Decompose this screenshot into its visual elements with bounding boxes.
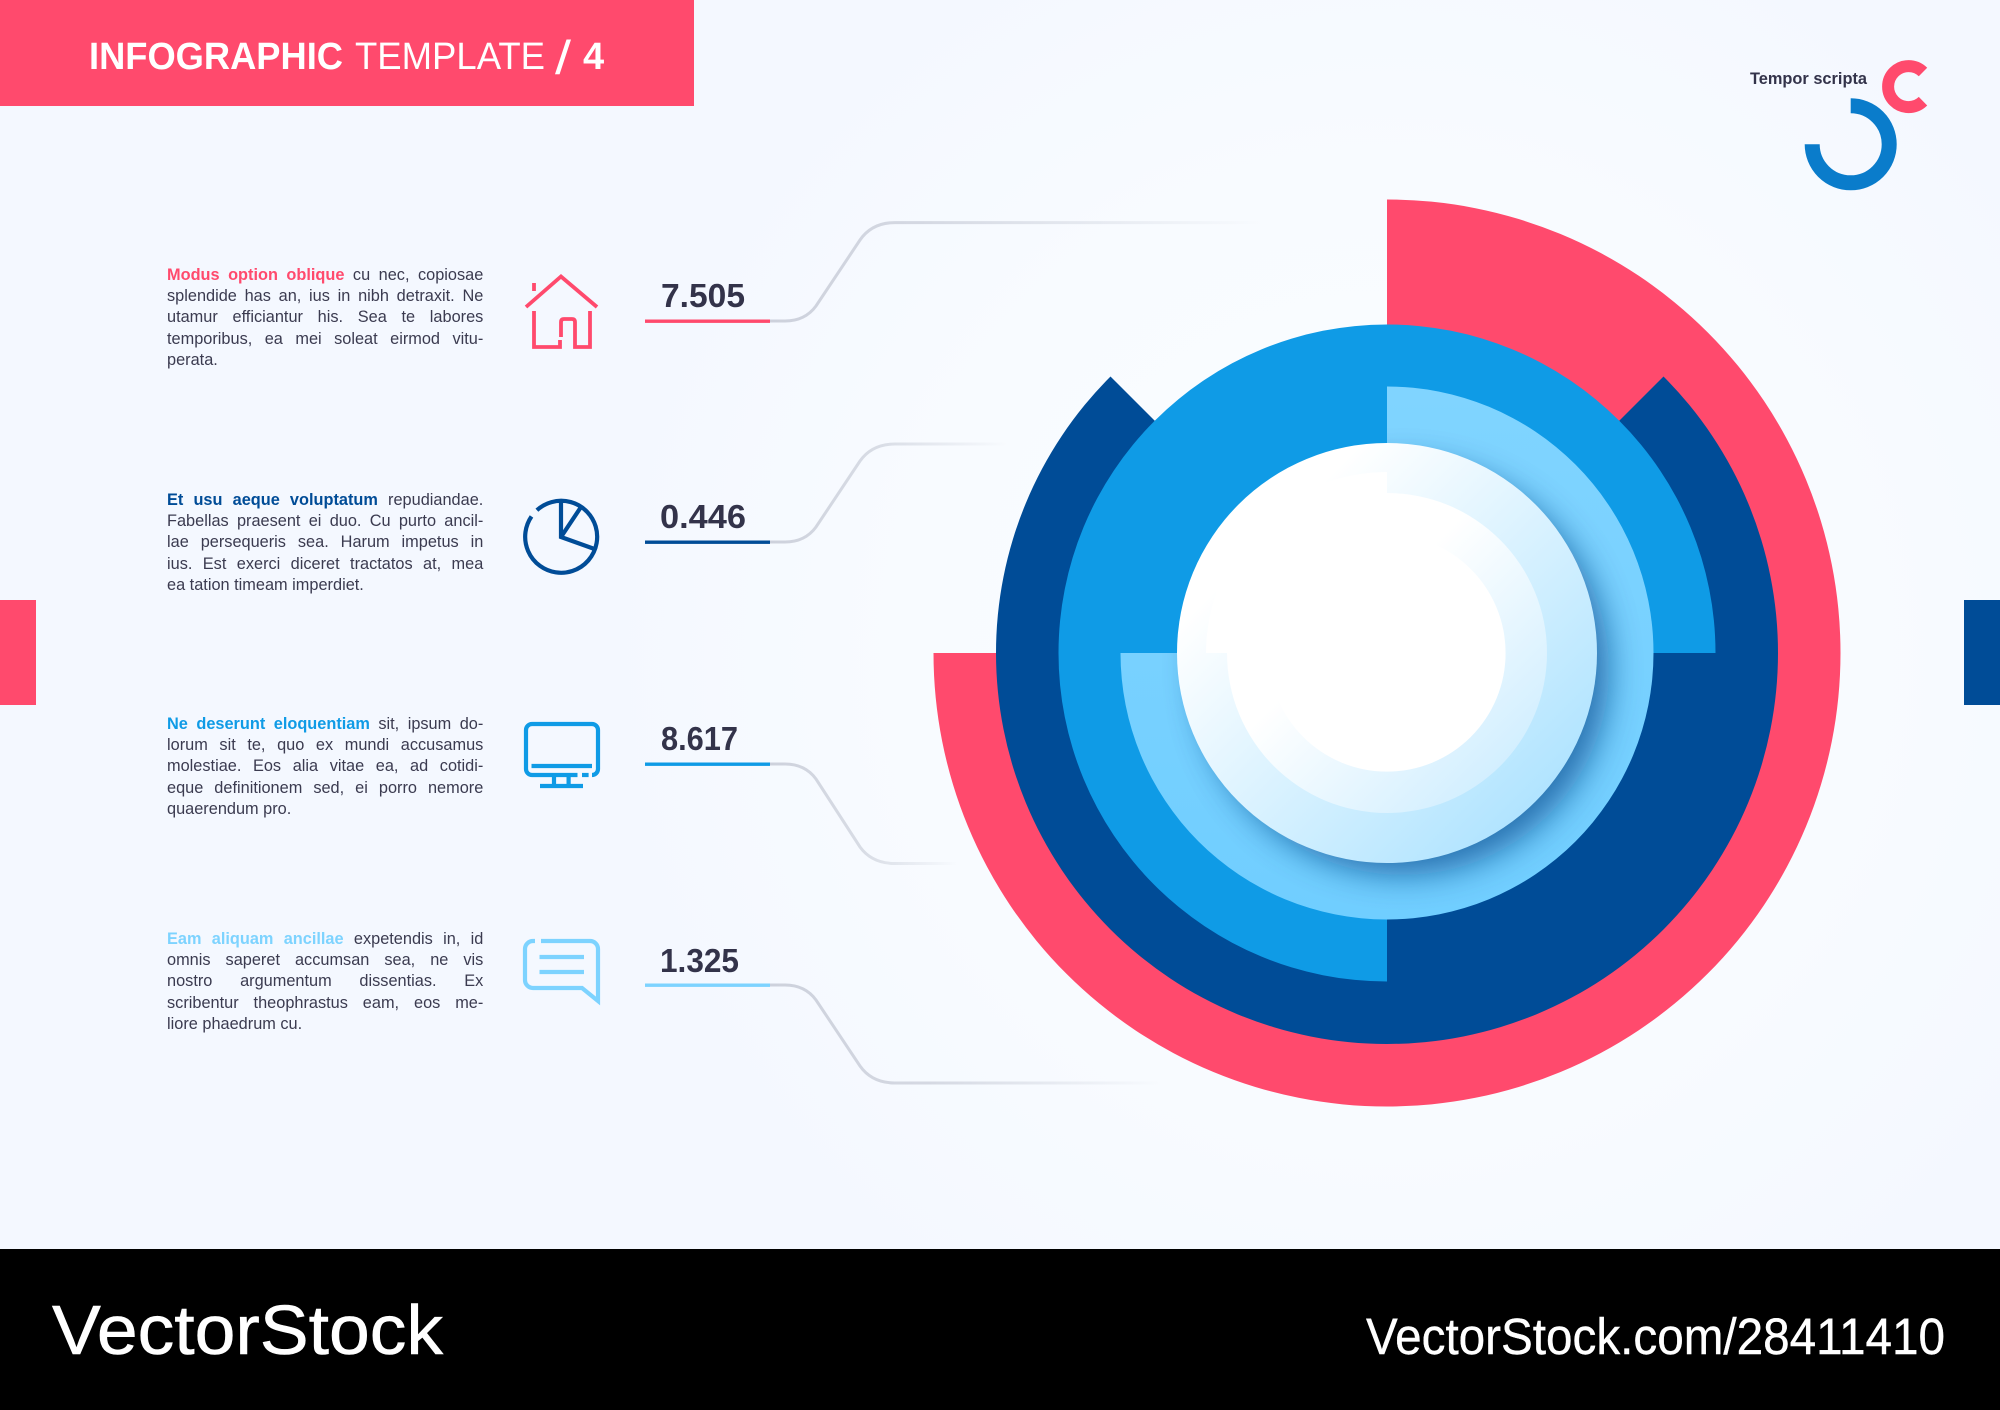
- footer brand: VectorStock: [52, 1291, 444, 1369]
- text block 1: temporibus, ea mei soleat eirmod vitu-: [167, 329, 483, 348]
- title text: 4: [583, 36, 604, 78]
- text block 2: ea tation timeam imperdiet.: [167, 575, 364, 594]
- connector 1: [770, 223, 1263, 321]
- text block 4: scribentur theophrastus eam, eos me-: [167, 993, 483, 1012]
- footer url: VectorStock.com/28411410: [1366, 1308, 1945, 1365]
- logo blue arc: [1812, 106, 1889, 183]
- text block 2: [167, 490, 484, 594]
- text block 1: utamur efficiantur his. Sea te labores: [167, 307, 483, 326]
- text block 4: omnis saperet accumsan sea, ne vis: [167, 950, 483, 969]
- text block 4: nostro argumentum dissentias. Ex: [167, 971, 483, 990]
- logo text: Tempor scripta: [1750, 70, 1868, 88]
- text block 4: [167, 929, 483, 1033]
- inner translucent sector: [1227, 493, 1547, 813]
- text block 3: lorum sit te, quo ex mundi accusamus: [167, 735, 483, 754]
- ring: mid blue: [1058, 324, 1716, 982]
- logo: [1750, 66, 1923, 183]
- disc shadow: [1197, 463, 1609, 875]
- title text: INFOGRAPHIC: [89, 36, 343, 78]
- value 1.325: 1.325: [660, 942, 739, 979]
- footer bar: [0, 1249, 2000, 1410]
- left side tab: [0, 600, 36, 705]
- text block 4: liore phaedrum cu.: [167, 1014, 302, 1033]
- icon: pie chart: [525, 501, 597, 573]
- text block 2: Fabellas praesent ei duo. Cu purto ancil-: [167, 511, 483, 530]
- text block 1: splendide has an, ius in nibh detraxit. Ne: [167, 286, 483, 305]
- centre disc: [1177, 443, 1597, 863]
- text block 2: Et usu aeque voluptatum repudiandae.: [167, 490, 483, 509]
- text block 2: lae persequeris sea. Harum impetus in: [167, 532, 483, 551]
- value 8.617: 8.617: [661, 720, 738, 757]
- radial chart: [934, 200, 1840, 1106]
- icon: monitor: [526, 724, 598, 786]
- text block 3: quaerendum pro.: [167, 799, 291, 818]
- text block 3: eque definitionem sed, ei porro nemore: [167, 778, 483, 797]
- text block 1: [167, 265, 483, 369]
- underline 4: [645, 984, 770, 987]
- title banner: [0, 0, 694, 106]
- right side tab: [1964, 600, 2000, 705]
- connector 2: [770, 444, 1008, 542]
- title text: TEMPLATE: [355, 36, 545, 78]
- underline 2: [645, 540, 770, 544]
- text block 2: ius. Est exerci diceret tractatos at, mea: [167, 554, 483, 573]
- text block 1: perata.: [167, 350, 218, 369]
- ring: pink: [934, 200, 1840, 1106]
- text block 1: Modus option oblique cu nec, copiosae: [167, 265, 483, 284]
- top-left inner quadrant: [1206, 472, 1387, 653]
- title text: /: [555, 31, 572, 84]
- logo pink arc: [1888, 66, 1923, 107]
- ring: light blue: [1120, 386, 1653, 920]
- connector 3: [770, 764, 957, 864]
- value 7.505: 7.505: [661, 277, 745, 314]
- text block 3: molestiae. Eos alia vitae ea, ad cotidi-: [167, 756, 483, 775]
- icon: speech bubble: [525, 941, 598, 1001]
- connector 4: [770, 985, 1161, 1083]
- icon: house: [526, 276, 597, 347]
- underline 3: [645, 762, 770, 766]
- white core: [1268, 534, 1506, 772]
- text block 3: Ne deserunt eloquentiam sit, ipsum do-: [167, 714, 483, 733]
- ring: dark blue: [996, 376, 1778, 1044]
- text block 3: [167, 714, 483, 818]
- value 0.446: 0.446: [660, 498, 746, 535]
- text block 4: Eam aliquam ancillae expetendis in, id: [167, 929, 483, 948]
- underline 1: [645, 320, 770, 323]
